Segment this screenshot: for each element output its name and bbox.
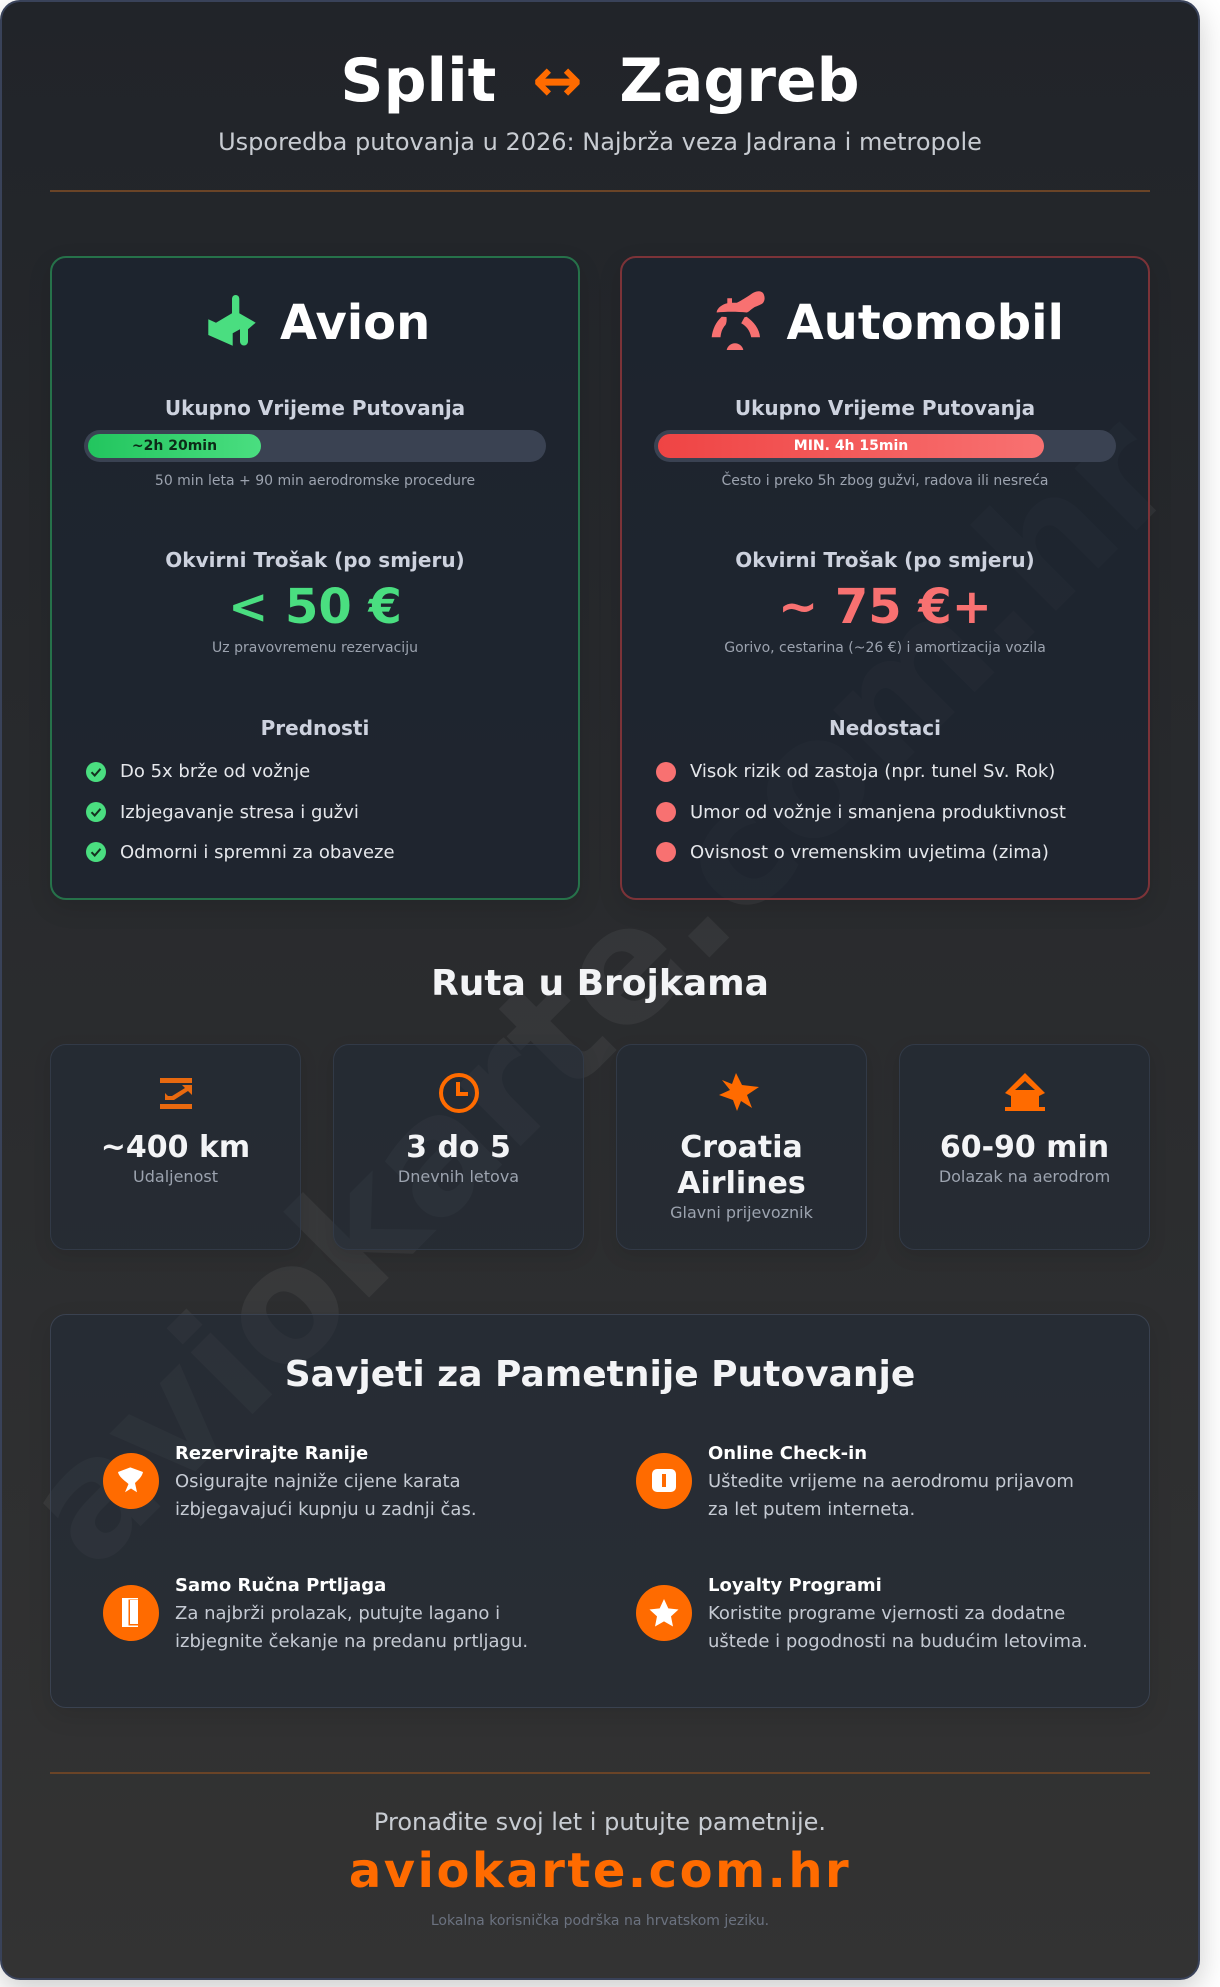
icon: star [719, 1073, 759, 1111]
tip text: za let putem interneta. [708, 1499, 915, 1520]
value: 3 do 5 [406, 1130, 511, 1165]
con 2: Umor od vožnje i smanjena produktivnost [690, 802, 1066, 823]
tip title: Loyalty Programi [708, 1575, 882, 1596]
time heading: Avion: Ukupno Vrijeme Putovanja [165, 396, 465, 420]
tip text: Osigurajte najniže cijene karata [175, 1471, 461, 1492]
icon: plane [208, 295, 256, 346]
footer note: Lokalna korisnička podrška na hrvatskom jeziku. [431, 1913, 769, 1929]
value: Croatia [680, 1130, 803, 1165]
label: Glavni prijevoznik [670, 1203, 813, 1222]
stat: flights [333, 1044, 584, 1250]
icon: tag [103, 1453, 159, 1509]
tip text: izbjegnite čekanje na predanu prtljagu. [175, 1631, 528, 1652]
time bar: Automobil: MIN. 4h 15min [794, 438, 908, 454]
pros heading: Prednosti [261, 716, 369, 740]
tip text [175, 1471, 477, 1520]
heading: Ruta u Brojkama: Ruta u Brojkama [431, 963, 769, 1004]
time bar: Avion: ~2h 20min [132, 438, 217, 454]
cost note: Avion: Uz pravovremenu rezervaciju [212, 640, 418, 656]
tip text [175, 1603, 528, 1652]
cost heading: Avion: Okvirni Trošak (po smjeru) [165, 548, 465, 572]
stat: airline [616, 1044, 867, 1250]
icon: terminal [1005, 1073, 1045, 1111]
time note: Avion: 50 min leta + 90 min aerodromske procedure [155, 473, 475, 489]
heading: Automobil: Automobil [786, 295, 1064, 351]
label: Dnevnih letova [398, 1167, 519, 1186]
footer [50, 1772, 1150, 1929]
cost note: Automobil: Gorivo, cestarina (~26 €) i amortizacija vozila [724, 640, 1046, 656]
header [50, 46, 1150, 192]
time bar: Avion [84, 430, 546, 462]
price: Avion: < 50 € [228, 579, 402, 635]
watermark: aviokarte.com.hr [0, 379, 1200, 1601]
tip title: Samo Ručna Prtljaga [175, 1575, 386, 1596]
icon: clock [439, 1073, 479, 1113]
cost heading: Automobil: Okvirni Trošak (po smjeru) [735, 548, 1035, 572]
value: 60-90 min [940, 1130, 1109, 1165]
time bar: Automobil [654, 430, 1116, 462]
brand: aviokarte.com.hr [349, 1843, 851, 1899]
pro 3: Odmorni i spremni za obaveze [120, 842, 395, 863]
pro 1: Do 5x brže od vožnje [120, 761, 310, 782]
label: Udaljenost [133, 1167, 218, 1186]
value line 2: Airlines [677, 1166, 806, 1201]
panel: tips [50, 1314, 1150, 1708]
price: Automobil: ~ 75 €+ [778, 579, 992, 635]
cons heading: Nedostaci [829, 716, 941, 740]
tip title: Rezervirajte Ranije [175, 1443, 368, 1464]
tip text: uštede i pogodnosti na budućim letovima. [708, 1631, 1088, 1652]
tip text [708, 1603, 1088, 1652]
tip text: izbjegavajući kupnju u zadnji čas. [175, 1499, 477, 1520]
stat: arrival [899, 1044, 1150, 1250]
tip text: Za najbrži prolazak, putujte lagano i [175, 1603, 500, 1624]
panel: Avion [50, 256, 580, 900]
heading: tips: Savjeti za Pametnije Putovanje [285, 1354, 915, 1395]
tip text [708, 1471, 1074, 1520]
icon: steering wheel [712, 291, 765, 350]
tip title: Online Check-in [708, 1443, 867, 1464]
tip: hand luggage [103, 1575, 528, 1652]
icon: luggage [103, 1585, 159, 1641]
heading: Avion: Avion [280, 295, 430, 351]
footer text: Pronađite svoj let i putujte pametnije. [374, 1808, 826, 1836]
time heading: Automobil: Ukupno Vrijeme Putovanja [735, 396, 1035, 420]
icon: distance [160, 1078, 192, 1109]
pros list [86, 761, 395, 863]
con 3: Ovisnost o vremenskim uvjetima (zima) [690, 842, 1049, 863]
stat: distance [50, 1044, 301, 1250]
tip: loyalty [636, 1575, 1088, 1652]
pro 2: Izbjegavanje stresa i gužvi [120, 802, 359, 823]
panel: Automobil [620, 256, 1150, 900]
label: Dolazak na aerodrom [939, 1167, 1110, 1186]
tip: check-in [636, 1443, 1074, 1520]
icon: device [636, 1453, 692, 1509]
subtitle: Usporedba putovanja u 2026: Najbrža veza Jadrana i metropole [218, 128, 982, 156]
tip text: Uštedite vrijeme na aerodromu prijavom [708, 1471, 1074, 1492]
icon: star [636, 1585, 692, 1641]
tip: book early [103, 1443, 477, 1520]
con 1: Visok rizik od zastoja (npr. tunel Sv. Rok) [690, 761, 1055, 782]
title: Split ↔ Zagreb [340, 46, 860, 116]
cons list [656, 761, 1066, 863]
value: ~400 km [101, 1130, 250, 1165]
time note: Automobil: Često i preko 5h zbog gužvi, radova ili nesreća [722, 473, 1048, 489]
tip text: Koristite programe vjernosti za dodatne [708, 1603, 1065, 1624]
